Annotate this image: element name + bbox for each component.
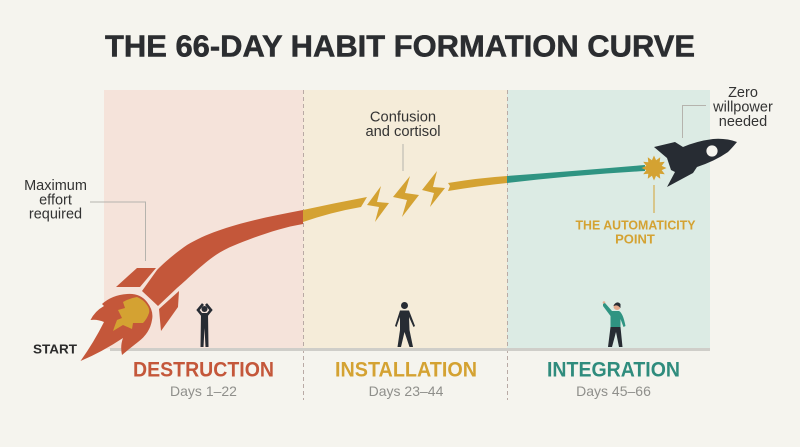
callout: confusion and cortisol: Confusion bbox=[370, 110, 436, 126]
callout: maximum effort: effort bbox=[39, 192, 72, 208]
callout: maximum effort bbox=[24, 178, 146, 261]
title: THE 66-DAY HABIT FORMATION CURVE bbox=[105, 28, 695, 64]
callout: zero willpower bbox=[682, 85, 773, 138]
callout: confusion and cortisol: and cortisol bbox=[365, 124, 441, 140]
callout: zero willpower: needed bbox=[719, 114, 767, 130]
icon: automaticity starburst bbox=[642, 156, 666, 180]
icon: start rocket fins bbox=[116, 268, 179, 331]
section label: installation: Days 23–44 bbox=[369, 383, 444, 399]
callout: zero willpower: Zero bbox=[728, 85, 758, 101]
callout: zero willpower: willpower bbox=[712, 100, 773, 116]
callout: maximum effort: required bbox=[29, 206, 82, 222]
panel: integration background bbox=[507, 90, 710, 349]
section label: integration: Days 45–66 bbox=[576, 383, 651, 399]
curve: installation segment before bolts bbox=[303, 197, 367, 222]
figure: pointing person bbox=[603, 301, 626, 347]
section label: integration: INTEGRATION bbox=[547, 358, 680, 382]
section label: destruction bbox=[133, 358, 274, 399]
section label: integration bbox=[547, 358, 680, 399]
section label: destruction: Days 1–22 bbox=[170, 383, 237, 399]
icon: inner flame bbox=[113, 297, 149, 331]
figure: standing person bbox=[395, 302, 415, 347]
section label: destruction: DESTRUCTION bbox=[133, 358, 274, 382]
curve: installation segment after bolts bbox=[448, 176, 507, 191]
icon: black rocket bbox=[654, 139, 737, 187]
start label: START bbox=[33, 342, 77, 356]
section label: installation: INSTALLATION bbox=[335, 358, 477, 382]
callout: automaticity point bbox=[576, 185, 696, 246]
callout: maximum effort: Maximum bbox=[24, 178, 87, 194]
figure: overwhelmed person bbox=[198, 304, 211, 347]
curve: integration segment bbox=[507, 165, 645, 183]
callout: automaticity point: POINT bbox=[615, 232, 655, 246]
section label: installation bbox=[335, 358, 477, 399]
icon: start rocket flame bbox=[80, 294, 152, 361]
callout: confusion and cortisol bbox=[365, 110, 441, 171]
icon: lightning bolts bbox=[367, 171, 445, 222]
panel: destruction background bbox=[104, 90, 303, 349]
callout: automaticity point: THE AUTOMATICITY bbox=[576, 218, 696, 232]
baseline axis bbox=[110, 348, 710, 351]
curve: destruction segment bbox=[142, 210, 303, 306]
panel: installation background bbox=[303, 90, 507, 349]
